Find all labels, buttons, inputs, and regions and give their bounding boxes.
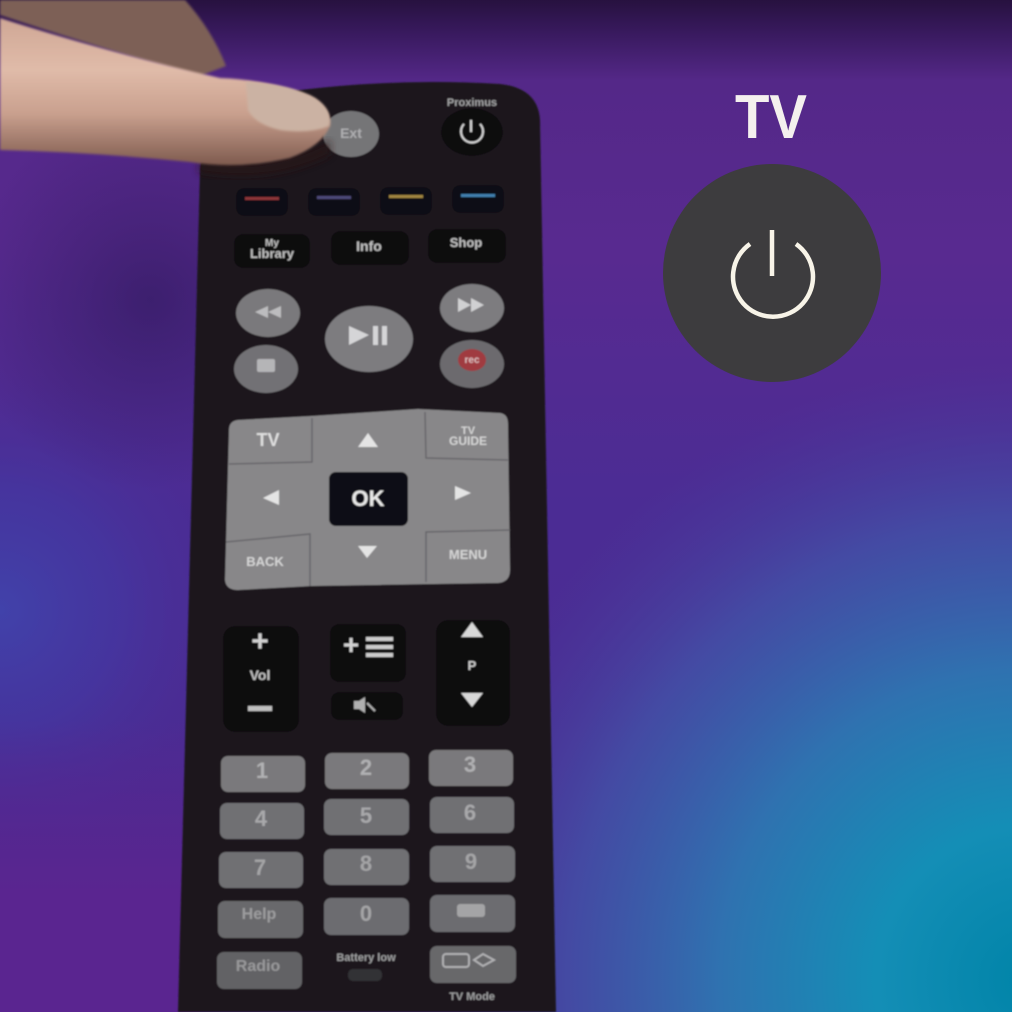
navigation pad: MENU — [449, 547, 487, 562]
number keys: 0 — [360, 901, 372, 926]
number keys: 3 — [464, 752, 476, 777]
number keys: Help — [242, 906, 277, 923]
volume rocker: Vol — [250, 667, 270, 683]
shadow under finger — [198, 140, 330, 176]
colour buttons row — [236, 185, 504, 216]
navigation pad: TV — [461, 425, 476, 437]
navigation pad: GUIDE — [449, 434, 487, 448]
label: Battery low: Battery low — [336, 952, 396, 964]
programme rocker: P — [468, 658, 477, 673]
button: Proximus power — [441, 97, 503, 156]
number keys: 8 — [360, 851, 372, 876]
fingernail — [246, 82, 330, 131]
icon: power button — [663, 164, 881, 382]
menu buttons: My Library, Info, Shop: My — [265, 238, 279, 249]
finger pressing button — [0, 0, 330, 176]
label: Battery low — [336, 952, 396, 981]
number keys — [217, 750, 516, 989]
OK button — [329, 472, 408, 526]
menu buttons: My Library, Info, Shop: Library — [250, 246, 295, 261]
navigation pad — [225, 409, 510, 590]
remote body — [178, 82, 556, 1012]
number keys: 4 — [255, 806, 268, 831]
playback buttons — [234, 284, 504, 393]
button: Ext — [323, 111, 379, 157]
number keys: 6 — [464, 800, 476, 825]
guide and mute buttons — [330, 624, 406, 720]
number keys: Radio — [236, 958, 280, 975]
navigation pad: BACK — [246, 554, 284, 569]
button: Proximus power: Proximus — [447, 97, 497, 109]
title: TV: TV — [735, 83, 807, 152]
button: Ext: Ext — [340, 125, 362, 141]
OK button: OK — [352, 486, 385, 511]
playback buttons: rec — [464, 355, 480, 366]
hand behind finger — [0, 0, 226, 76]
guide and mute buttons: + — [343, 629, 359, 660]
number keys: 2 — [360, 755, 372, 780]
finger — [0, 18, 330, 165]
number keys: 7 — [254, 855, 266, 880]
volume rocker — [223, 625, 299, 732]
remote control — [178, 82, 556, 1012]
number keys: 1 — [256, 758, 268, 783]
number keys: 9 — [465, 849, 477, 874]
navigation pad: TV — [256, 430, 280, 450]
label: TV Mode: TV Mode — [449, 991, 495, 1003]
menu buttons: My Library, Info, Shop — [234, 229, 506, 268]
volume rocker: + — [251, 625, 269, 658]
programme rocker — [436, 620, 510, 726]
menu buttons: My Library, Info, Shop: Info — [356, 238, 382, 254]
menu buttons: My Library, Info, Shop: Shop — [450, 235, 482, 250]
number keys: 5 — [360, 803, 372, 828]
